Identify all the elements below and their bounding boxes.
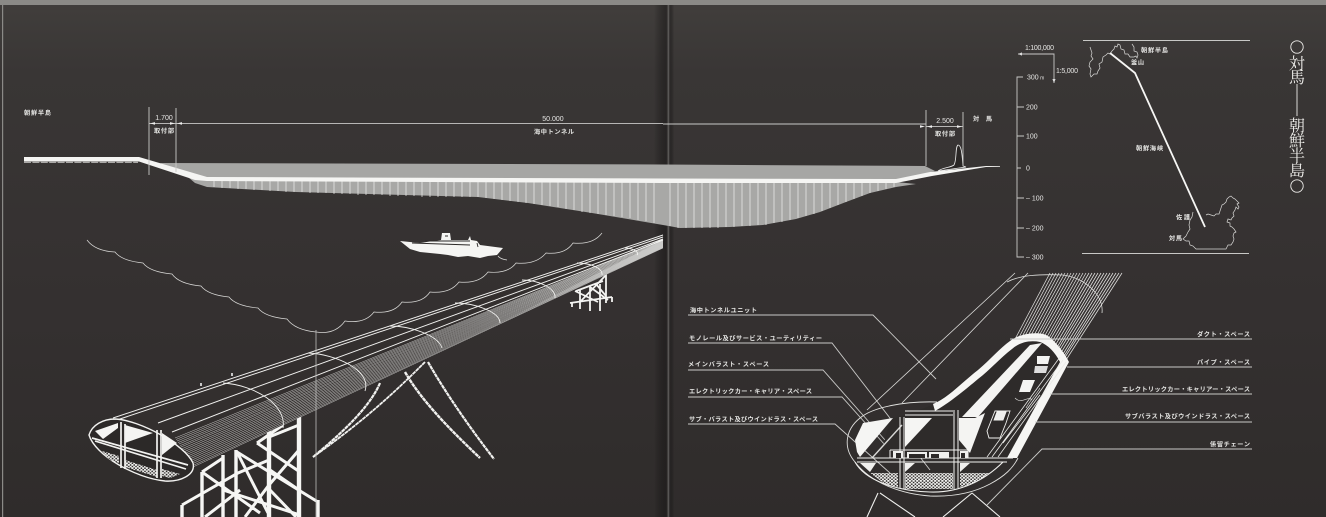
- left callouts: メインバラスト・スペース: [688, 362, 769, 368]
- Korean coast: [1089, 44, 1138, 77]
- outer section outline: [847, 402, 1018, 496]
- section white triangles: [855, 418, 893, 457]
- roadway lines: [987, 357, 1066, 457]
- pile lines: [214, 180, 894, 228]
- right callouts: エレクトリックカー・キャリアー・スペース: [1122, 386, 1250, 394]
- sea bed below tunnel: [182, 172, 930, 228]
- end section: [89, 419, 193, 481]
- right callouts: ダクト・スペース: [1197, 330, 1250, 338]
- vertical title: 島: [1289, 162, 1305, 180]
- inner white band: [962, 343, 1042, 417]
- section labels: [24, 109, 992, 138]
- dimension arrows: [150, 122, 962, 128]
- tunnel route: [1110, 53, 1205, 227]
- left paper edge: [2, 0, 3, 517]
- section columns and floors: [857, 410, 1013, 489]
- large tower: [182, 400, 318, 517]
- scale axis: 1:100,000: [1025, 45, 1054, 52]
- electric car far: [1034, 356, 1050, 373]
- right cell white band: [959, 413, 985, 453]
- vertical reference line: [315, 330, 317, 517]
- hatched tube surface: [975, 273, 1122, 415]
- scale axis: 300 m: [1027, 74, 1044, 82]
- ship: [400, 233, 507, 260]
- section labels: 朝鮮半島: [24, 109, 51, 117]
- section labels: 2.500: [936, 118, 954, 125]
- vertical title: [1289, 41, 1305, 192]
- small tower: [570, 268, 612, 311]
- water body: [160, 163, 935, 181]
- section labels: 取付部: [154, 127, 175, 135]
- vertical title: 対: [1289, 55, 1305, 73]
- upper tube outlines: [867, 273, 1102, 410]
- location map: [1082, 40, 1250, 254]
- diagonal rails: [872, 425, 902, 458]
- interior mask: [880, 335, 1067, 458]
- left callouts: サブ・バラスト及びウインドラス・スペース: [689, 416, 818, 424]
- left callouts: [688, 306, 936, 473]
- right callouts: [987, 330, 1252, 505]
- dimension lines: [149, 107, 963, 175]
- vertical title: 馬: [1289, 69, 1305, 87]
- scale axis: [1017, 45, 1078, 262]
- section labels: 対 馬: [973, 115, 992, 123]
- scale axis: 1:5,000: [1056, 68, 1078, 75]
- location map: 対馬: [1169, 234, 1182, 242]
- small wedges: [860, 463, 970, 472]
- scale axis: – 300: [1026, 254, 1044, 262]
- Tsushima coast: [1183, 196, 1239, 249]
- cutaway tunnel: [847, 273, 1122, 517]
- right callouts: パイプ・スペース: [1197, 360, 1250, 366]
- vertical title: 鮮: [1289, 132, 1305, 150]
- anchor chains: [867, 493, 1000, 517]
- top longitudinal lines: [113, 235, 663, 432]
- location map: 朝鮮半島: [1141, 46, 1168, 54]
- left callouts: モノレール及びサービス・ユーティリティー: [689, 334, 822, 342]
- scale axis: 200: [1026, 104, 1038, 112]
- left tunnel tube: [89, 235, 663, 481]
- scale axis: – 100: [1026, 196, 1044, 202]
- location map: 佐護: [1176, 214, 1191, 222]
- section labels: 50.000: [542, 116, 564, 123]
- vertical title: 半: [1289, 147, 1305, 165]
- cable tracks: [1015, 388, 1040, 408]
- right callouts: サブバラスト及びウインドラス・スペース: [1125, 412, 1250, 420]
- location map: 釜山: [1131, 58, 1144, 66]
- book spine: [654, 5, 674, 517]
- section labels: 海中トンネル: [534, 128, 574, 136]
- left callouts: エレクトリックカー・キャリア・スペース: [689, 388, 812, 396]
- sea surface scallops: [87, 233, 602, 333]
- inspection studs: [201, 373, 232, 386]
- white arch wall: [933, 333, 1069, 458]
- electric car middle: [1019, 380, 1035, 392]
- hull bottom: [855, 462, 1003, 492]
- left callouts: 海中トンネルユニット: [690, 306, 757, 314]
- tube surface lines: [175, 240, 663, 467]
- mooring chains left: [313, 362, 494, 459]
- section labels: 1.700: [155, 115, 173, 122]
- electric car near: [987, 411, 1010, 438]
- gallery boxes: [893, 451, 968, 458]
- land tunnel bar: [24, 157, 1000, 183]
- scale axis: 100: [1026, 134, 1038, 140]
- tube body mask: [89, 236, 663, 481]
- chart: longitudinal section of tunnel: [24, 107, 1000, 228]
- scale axis: 0: [1026, 166, 1030, 172]
- island profile: [938, 145, 966, 171]
- location map: 朝鮮海峡: [1136, 144, 1164, 152]
- far tube highlight: [500, 240, 663, 323]
- ballast gravel: [870, 473, 898, 487]
- approach dashes: [24, 161, 138, 163]
- right callouts: 係留チェーン: [1210, 440, 1250, 448]
- section labels: 取付部: [935, 130, 956, 138]
- vertical title: 朝: [1289, 117, 1305, 135]
- top paper edge: [0, 0, 1326, 5]
- scale axis: – 200: [1026, 226, 1044, 232]
- ring seams: [223, 248, 638, 428]
